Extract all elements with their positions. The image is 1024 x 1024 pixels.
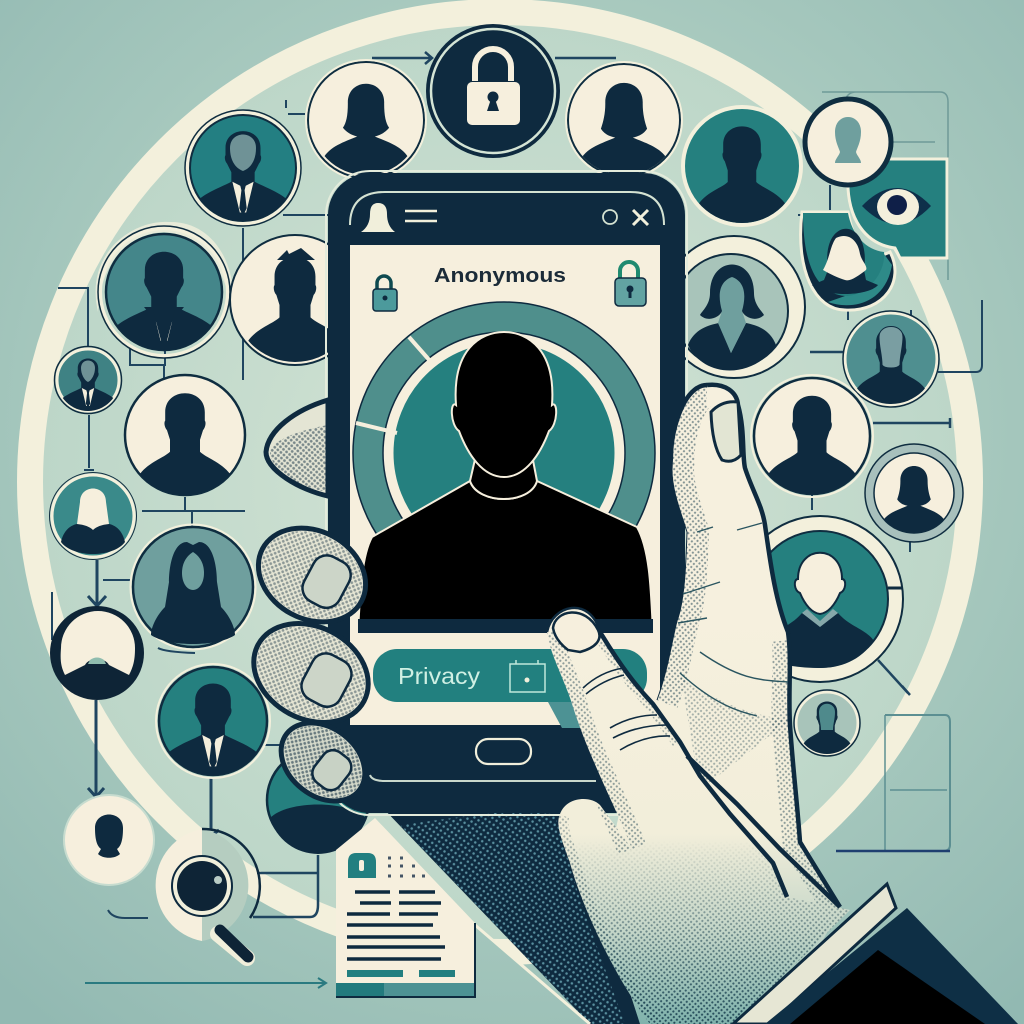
index finger outline [600,632,787,897]
thumb halftone shading [657,385,840,907]
thumb nail [711,402,741,461]
menu lines [405,211,437,221]
dark sleeve shadow with halftone [380,790,660,1024]
avatar: shield woman [801,212,895,310]
silhouette neck [470,455,537,499]
finger: middle left [236,604,386,742]
avatar: cream man, right [751,375,873,497]
avatar: padlock circle [426,24,560,158]
finger creases [583,668,670,750]
screen [350,245,660,725]
avatar: long haired woman [130,524,256,650]
document grid dots [388,858,425,876]
avatar: suited man, top left [185,110,301,226]
document text lines [347,892,445,959]
finger: upper left [242,510,382,640]
privacy button [373,649,647,728]
icon: left lock [373,276,397,311]
icon: magnifying glass in split circle [156,829,260,958]
avatar: teal man, top right [683,107,801,225]
avatar: woman, top [306,60,426,180]
silhouette base strip [358,619,653,633]
avatar: woman, top right [566,62,682,178]
avatar: cream small head [64,795,154,885]
avatar: grey teal man, right [843,311,939,407]
avatar: woman, right of phone [663,236,805,378]
profile gauge ring [353,302,655,604]
thumb creases [678,523,788,716]
avatar: cream man, left [125,375,245,495]
hand: index finger and back of hand [540,608,850,1024]
avatar: dark teal man, left [96,222,233,358]
avatar: small dark man, left [54,346,122,414]
finger: lower left [266,707,380,817]
avatar: small grey man, right [794,690,860,756]
icon: document badge [348,853,376,878]
avatar: large bald man, right [736,516,903,682]
privacy button: Privacy [398,663,481,689]
smartphone [326,171,687,815]
index halftone shading [540,632,850,1024]
bottom highlight [370,775,596,781]
label: anonymous: Anonymous [434,265,566,287]
thumb outline [657,385,840,907]
icon: eye [862,188,931,225]
silhouette head [452,332,556,477]
avatar: black ring portrait [50,606,144,700]
screen highlight [350,192,664,225]
icon: info circle [603,210,617,224]
index finger nail [553,612,599,652]
silhouette shoulders [358,481,653,633]
anonymous black silhouette [358,332,653,633]
home button [476,739,531,764]
avatar: suited man, lower left [156,664,270,778]
icon: right lock [615,262,646,306]
avatar: eye panel [848,159,947,258]
icon: battery lock [510,660,545,692]
document card [336,818,475,997]
icon: close [633,210,648,225]
avatar: small cream head with dark ring [805,99,891,185]
document buttons [347,970,455,977]
shirt cuff [733,884,896,1024]
icon: bell [361,203,395,232]
hand: thumb and palm [600,385,840,1024]
jacket sleeve [765,908,1018,1024]
avatar: woman, far right [865,444,963,542]
finger: behind phone [266,400,328,496]
area below ring at bottom [476,925,600,1024]
avatar: cream man behind phone [230,235,360,365]
avatar: teal woman with pale face [50,472,136,560]
avatar: teal behind fingers [267,749,369,854]
